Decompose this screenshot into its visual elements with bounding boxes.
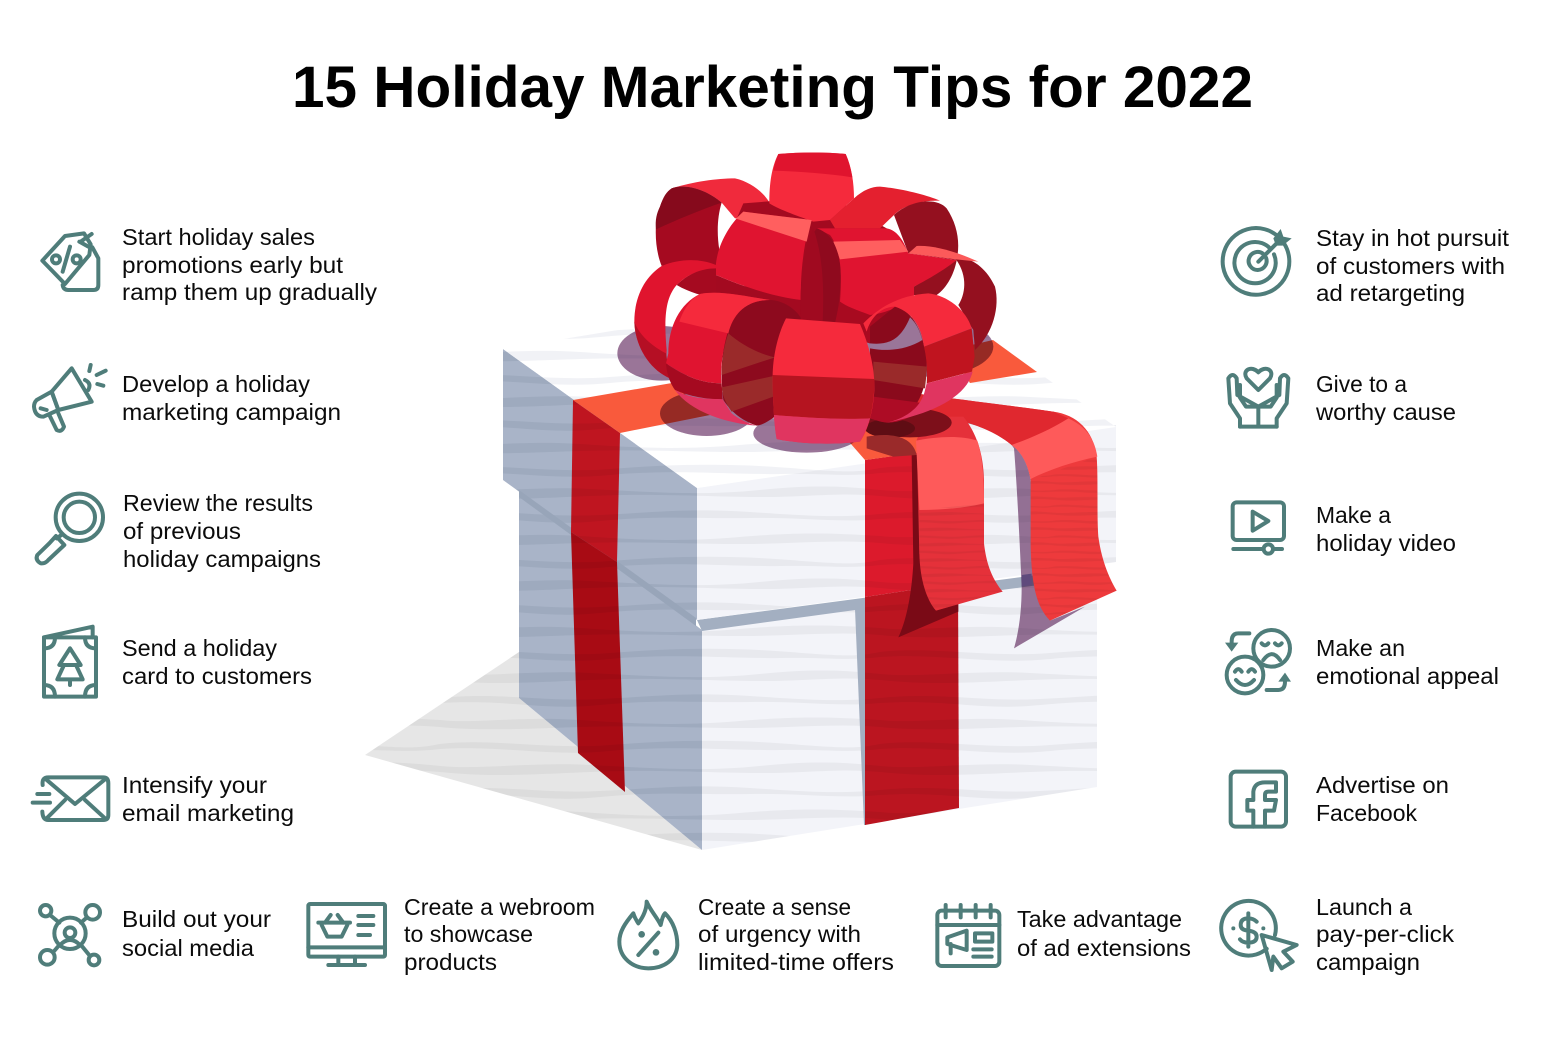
text [698, 894, 894, 975]
text [122, 906, 271, 961]
top ribbon front [830, 405, 925, 460]
text: Make an [1316, 635, 1405, 661]
centre right loop [817, 228, 957, 315]
text: promotions early but [122, 252, 344, 278]
right ribbon highlight [1012, 418, 1097, 479]
title: 15 Holiday Marketing Tips for 2022 [292, 55, 1253, 120]
text: Intensify your [122, 772, 267, 798]
far right loop inside [956, 259, 997, 350]
far left loop inner [677, 267, 716, 297]
text: social media [122, 935, 254, 961]
text: products [404, 949, 497, 975]
text: worthy cause [1315, 399, 1456, 425]
left ribbon on body [571, 532, 625, 792]
text: email marketing [122, 800, 294, 826]
far left loop shade [634, 322, 670, 378]
left ribbon highlight [916, 437, 984, 510]
text [1316, 502, 1456, 556]
text [123, 490, 321, 572]
left ribbon texture [571, 400, 625, 792]
right front loop inside [870, 307, 927, 423]
illustration: gift box [365, 152, 1117, 850]
top centre loop [769, 152, 854, 222]
tip: retargeting [1223, 225, 1510, 306]
icon: facebook logo [1231, 772, 1286, 827]
right front loop pink [887, 372, 973, 423]
shadow on ribbon [868, 408, 952, 437]
text: Give to a [1316, 371, 1407, 397]
text: to showcase [404, 921, 533, 947]
centre right loop highlight [833, 240, 908, 259]
right ribbon [903, 392, 1117, 621]
tip: start holiday sales [42, 224, 378, 305]
far right loop highlight [908, 246, 978, 262]
left front loop highlight [679, 293, 770, 333]
icon: flame with percent [619, 902, 677, 968]
text: Start holiday sales [122, 224, 315, 250]
text [122, 224, 378, 305]
tip: urgency [619, 894, 894, 975]
text: ramp them up gradually [122, 279, 378, 305]
lid shadow band [697, 567, 1097, 631]
text [404, 894, 595, 975]
top ribbon back [950, 340, 1037, 383]
icon: megaphone [34, 365, 106, 431]
icon: envelope [33, 777, 108, 820]
top centre loop shade [773, 152, 852, 177]
dark shadow on front ribbon [898, 455, 958, 637]
text: of customers with [1316, 253, 1505, 279]
bow [617, 152, 997, 457]
text [1315, 371, 1456, 425]
text: card to customers [122, 663, 312, 689]
text: emotional appeal [1316, 663, 1499, 689]
right front loop shadow window [870, 317, 922, 350]
tip: facebook [1231, 772, 1449, 827]
tip: holiday card [44, 627, 312, 697]
front centre loop pink [774, 415, 870, 444]
back left loop dark top [656, 187, 722, 229]
back left loop band [672, 178, 770, 218]
top ribbon left [573, 383, 710, 433]
text: limited-time offers [698, 949, 894, 975]
text: ad retargeting [1316, 280, 1465, 306]
text: Stay in hot pursuit [1316, 225, 1510, 251]
ribbon texture [919, 457, 1117, 621]
tip: webroom [308, 894, 595, 975]
centre left loop lower shade [716, 265, 801, 320]
tip: holiday campaign [34, 365, 341, 431]
right front loop bottom [870, 397, 925, 423]
left front loop inside [722, 300, 801, 426]
left ribbon [917, 417, 1003, 611]
icon: hands holding heart [1228, 369, 1288, 427]
box lid top face [503, 282, 1116, 488]
left front loop lower [666, 363, 723, 399]
tip: worthy cause [1228, 369, 1456, 427]
text [122, 635, 312, 689]
front centre loop dark band [773, 375, 874, 419]
lid underside line [519, 490, 696, 626]
text: campaign [1316, 949, 1420, 975]
right front loop see-through [873, 362, 927, 388]
text [1316, 894, 1455, 975]
front centre loop [773, 318, 874, 444]
text: of previous [123, 518, 241, 544]
centre left loop highlight [736, 212, 812, 242]
right ribbon shadow [957, 419, 1085, 648]
text: Create a sense [698, 894, 851, 920]
box body left face [519, 490, 702, 850]
tip: email marketing [33, 772, 294, 826]
bow shadows [617, 317, 993, 453]
icon: social network [40, 905, 100, 965]
centre right loop lower shade [833, 302, 910, 343]
front ribbon on lid [865, 447, 958, 597]
deep shadow on ribbon [865, 419, 915, 438]
text: holiday campaigns [123, 546, 321, 572]
box lid right face [697, 425, 1116, 620]
icon: price tag [42, 233, 98, 290]
box lid left face [503, 349, 697, 620]
centre fold left [801, 228, 823, 322]
icon: emotion faces [1225, 630, 1291, 693]
text: Facebook [1316, 800, 1417, 826]
text: of urgency with [698, 921, 861, 947]
icon: magnifying glass [37, 494, 103, 563]
far left loop [634, 260, 716, 378]
text [122, 371, 341, 425]
tip: holiday video [1233, 502, 1456, 556]
tip: social media [40, 905, 271, 965]
text: Send a holiday [122, 635, 277, 661]
text: holiday video [1316, 530, 1456, 556]
back left loop inside [656, 187, 722, 267]
icon: calendar with megaphone [937, 905, 999, 966]
hanging ribbons [898, 392, 1117, 648]
back right loop inside [894, 201, 958, 295]
left front loop pink [675, 390, 757, 426]
front ribbon texture [865, 447, 959, 825]
text: pay-per-click [1316, 921, 1455, 947]
shadow on orange [867, 435, 917, 457]
centre fold [801, 228, 841, 323]
centre left loop [716, 212, 812, 300]
text: Review the results [123, 490, 313, 516]
tip: pay-per-click [1221, 894, 1455, 975]
icon: target with arrow [1223, 228, 1292, 295]
text: of ad extensions [1017, 935, 1191, 961]
text: Launch a [1316, 894, 1412, 920]
left front loop see-through [722, 333, 775, 412]
left front loop band [666, 293, 770, 383]
text: Take advantage [1017, 906, 1182, 932]
lid gap tint [1022, 574, 1032, 586]
right front loop lower [924, 328, 975, 383]
right front loop band [863, 293, 972, 347]
text: Advertise on [1316, 772, 1449, 798]
text: Make a [1316, 502, 1391, 528]
icon: greeting card [44, 627, 96, 697]
icon: monitor with basket [308, 904, 385, 965]
tip: ad extensions [937, 905, 1191, 966]
text [1316, 225, 1510, 306]
text: marketing campaign [122, 399, 341, 425]
text [1316, 635, 1499, 689]
text: Build out your [122, 906, 271, 932]
text [122, 772, 294, 826]
tip: review results [37, 490, 321, 572]
box body right face [702, 575, 1097, 850]
icon: dollar coin with cursor [1221, 901, 1297, 970]
back right loop band [830, 187, 940, 228]
text [1316, 772, 1449, 826]
icon: video player [1233, 502, 1284, 554]
left ribbon on lid [571, 400, 620, 562]
ground shadow [365, 652, 702, 850]
front ribbon on body [865, 583, 959, 825]
bow core filler [716, 197, 914, 343]
tip: emotional appeal [1225, 630, 1499, 693]
ribbon shadow strip [855, 600, 866, 825]
text [1017, 906, 1191, 961]
text: Create a webroom [404, 894, 595, 920]
right ribbon upper shade [903, 392, 1068, 445]
text: Develop a holiday [122, 371, 311, 397]
